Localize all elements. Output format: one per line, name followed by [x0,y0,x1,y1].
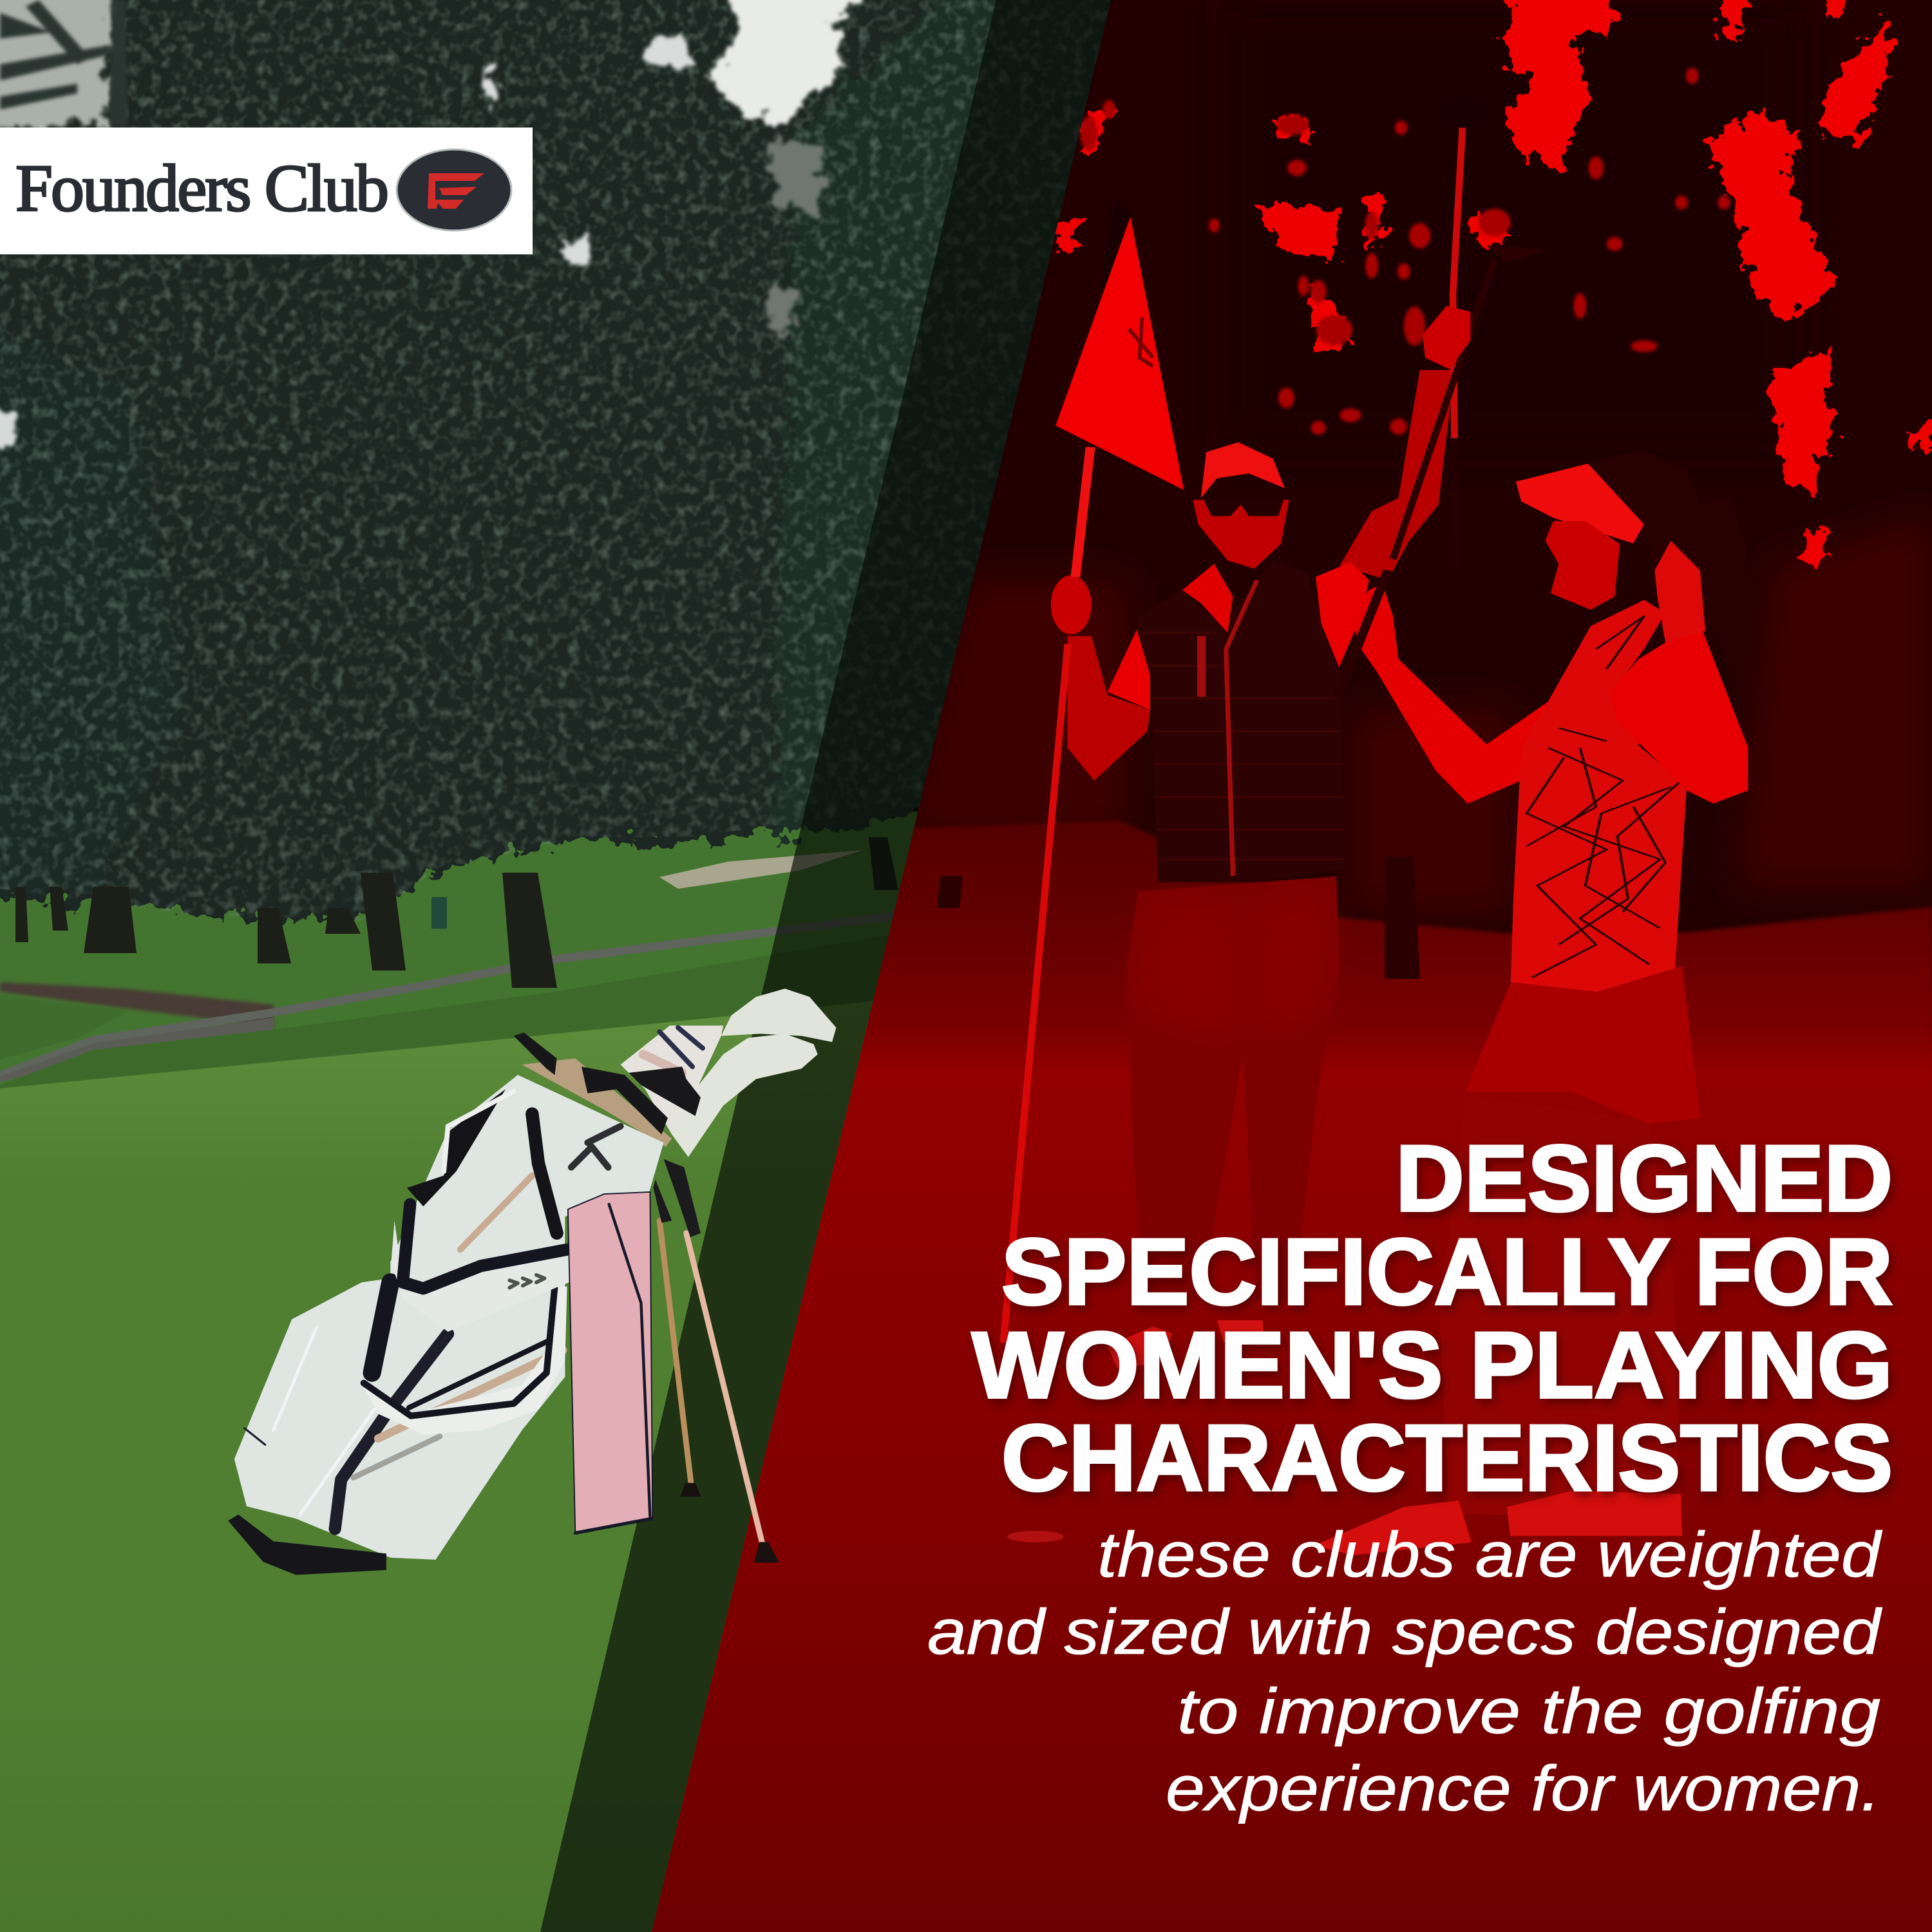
trouser highlight [1146,902,1323,1030]
zip [1226,580,1257,876]
logo background [0,128,533,254]
top [1511,600,1687,1004]
forest [0,0,1159,921]
man's trousers [1127,876,1340,1301]
top pattern [1526,616,1681,978]
bright red tree gaps [1057,0,1932,564]
right arm [1609,631,1748,804]
hair [1588,450,1756,708]
upper flap [392,1221,569,1332]
raised hand [1654,541,1705,643]
flag emblem [1129,317,1153,366]
bag silhouette [234,1075,664,1560]
golfers upper bodies [1051,370,1756,1004]
flag [1056,217,1184,490]
sky patches [0,0,886,447]
flag top [1101,198,1132,290]
forward arm [1350,583,1548,804]
paths [0,916,895,1082]
top-left branches [0,0,128,126]
flag pole upper [1075,447,1090,577]
visor [1516,464,1644,544]
chevrons [509,1275,544,1288]
photo: red duotone golfers [644,0,1932,1932]
left arm [1068,636,1150,781]
brand name: Founders Club [15,151,389,225]
body copy: experience for women. [1166,1752,1880,1824]
club grip [1337,571,1388,698]
bunker [659,850,863,889]
red tree background [881,0,1932,966]
heading: CHARACTERISTICS [1001,1405,1893,1510]
body copy: and sized with specs designed [927,1596,1882,1667]
collar [1182,564,1233,632]
bag base [228,1515,386,1575]
putters and flag [1056,97,1548,571]
forest midtones [902,0,1932,914]
woman's skirt [1465,966,1700,1124]
lower flap [364,1287,567,1434]
left sleeve [1108,629,1150,710]
heading: SPECIFICALLY FOR [1001,1219,1893,1324]
mid green [0,927,934,1092]
vest quilting [1139,632,1344,859]
glasses [1204,500,1283,516]
flag pole lower [1003,644,1068,1343]
course bin [431,897,447,929]
golf hole [1007,1531,1064,1542]
headcovers [621,989,836,1157]
man's sleeve [1316,562,1369,672]
body copy: to improve the golfing [1177,1675,1880,1747]
foreground green [0,995,934,1932]
lawn tree trunks [937,857,1420,979]
pockets and zips [245,1175,563,1529]
distant lawn [0,811,966,1108]
woman's legs [1439,1095,1681,1520]
cap [1201,442,1285,498]
logo emblem [397,149,511,231]
shoulder strap [407,1089,506,1206]
heading: DESIGNED [1396,1126,1893,1231]
woman's shoes [1314,1491,1682,1555]
raised hand [1423,306,1470,369]
face [1193,500,1289,569]
heading [972,1126,1893,1510]
photo: golf bag [228,989,836,1575]
red lawn [644,821,1932,1932]
left hand [1051,575,1092,634]
forest texture [0,0,1159,914]
putter shafts [1393,97,1548,571]
heading: WOMEN'S PLAYING [972,1312,1893,1417]
man's shoes [1108,1320,1265,1368]
body copy [927,1519,1882,1824]
body copy: these clubs are weighted [1097,1519,1882,1590]
vest [1137,560,1345,882]
small tree gaps [1080,68,1730,435]
dark diagonal band [540,0,1111,1932]
logo panel [0,128,533,254]
raised arm [1340,370,1455,580]
mesh and handle [522,1059,672,1147]
tree trunks [15,837,898,988]
photo: golf course [0,0,1159,1932]
vest pocket [1197,636,1206,697]
towel [568,1192,652,1534]
tripod legs [654,1159,779,1562]
woman's face [1545,521,1620,610]
irons [629,1066,701,1116]
